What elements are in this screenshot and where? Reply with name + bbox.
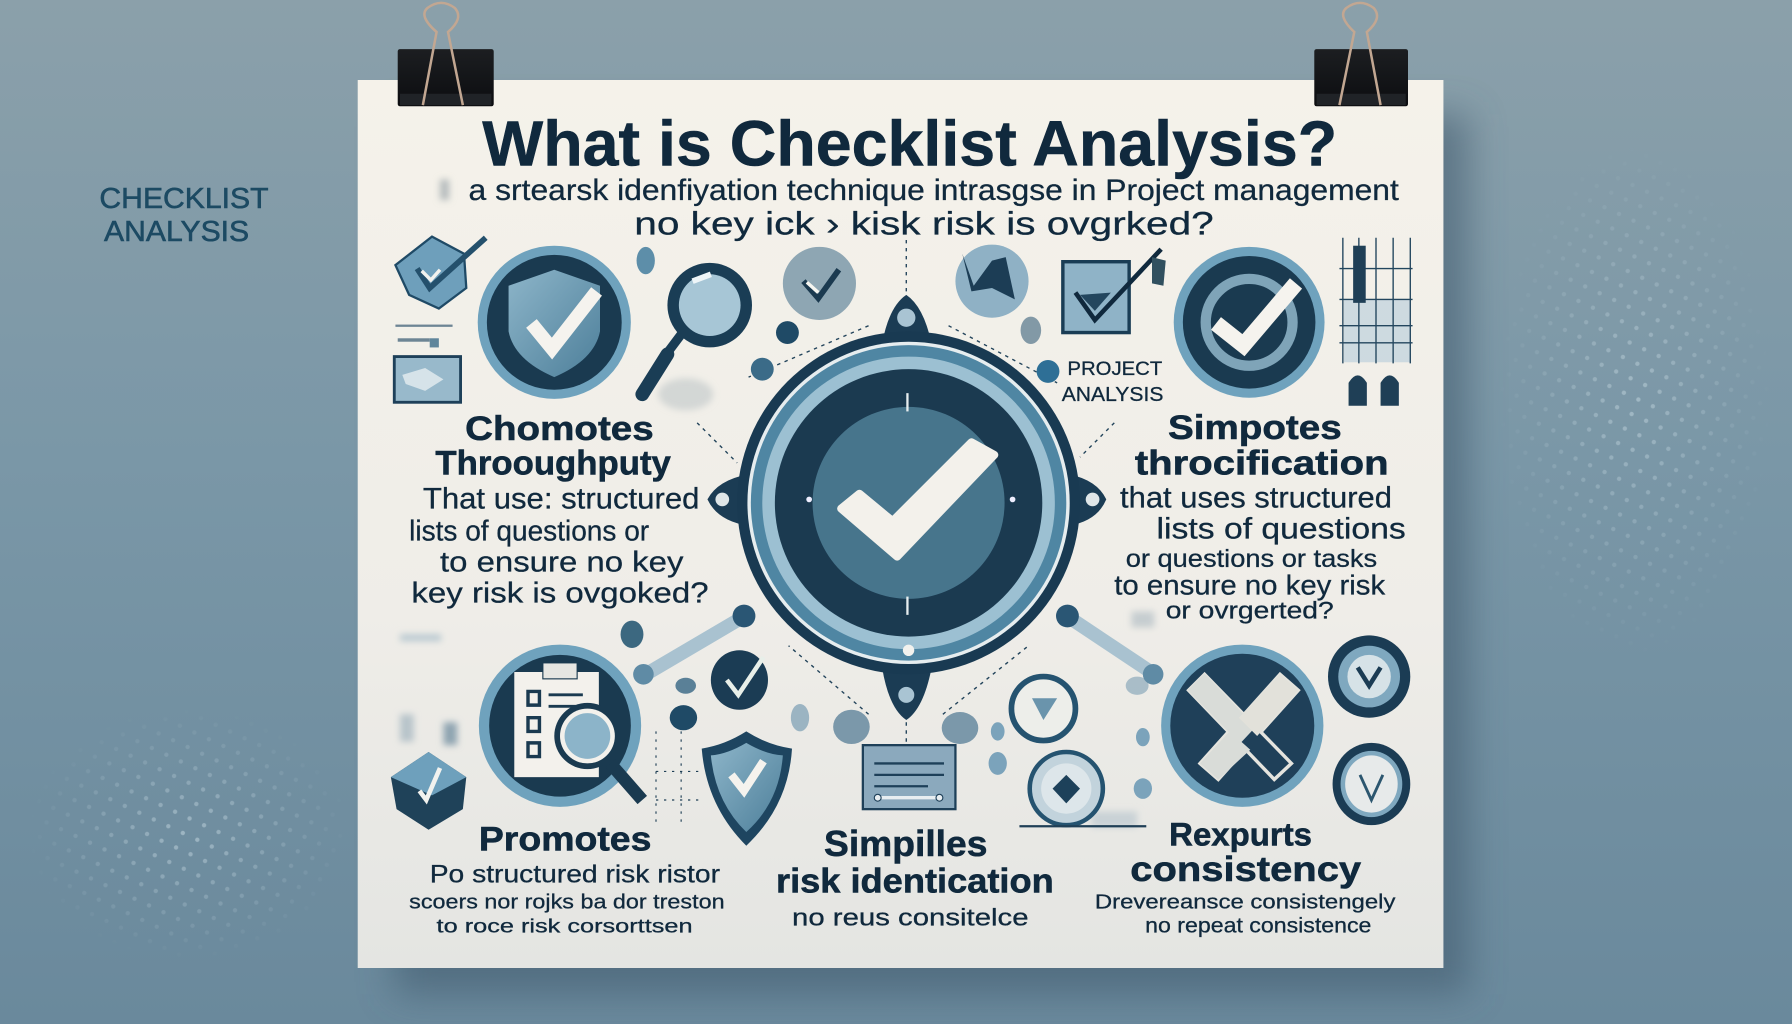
text block: left benefit: to ensure no key	[440, 546, 684, 578]
label: project analysis: ANALYSIS	[1062, 383, 1163, 406]
text block: right benefit: Simpotes	[1168, 409, 1342, 447]
icon: dark check circle	[711, 650, 768, 710]
icon: small framed window	[394, 357, 461, 402]
text block: bottom left: to roce risk corsorttsen	[437, 916, 693, 938]
icon: checkbox with pen	[1063, 249, 1166, 333]
text block: left benefit: That use: structured	[423, 483, 699, 516]
title: What is Checklist Analysis?	[482, 108, 1337, 180]
text block: left benefit	[409, 410, 709, 609]
text block: right benefit: or ovrgerted?	[1166, 597, 1334, 624]
dashed connectors	[697, 240, 1114, 743]
text block: bottom right	[1095, 817, 1396, 938]
icon: large check mark	[841, 442, 994, 557]
icon: shield with check	[702, 731, 792, 846]
icon: magnifying glass	[642, 263, 752, 394]
side label: checklist analysis: ANALYSIS	[104, 216, 249, 248]
side label: checklist analysis	[99, 183, 269, 248]
dotted grid	[656, 731, 699, 823]
label: project analysis: PROJECT	[1067, 358, 1162, 380]
text block: right benefit	[1114, 409, 1406, 624]
blurred smudges	[400, 179, 1154, 827]
scattered dots	[621, 247, 1152, 799]
binder clip left	[398, 3, 494, 106]
icon: ring with chevron	[1333, 743, 1410, 825]
connector band lower right	[1056, 605, 1163, 685]
icon: cross circle	[1161, 645, 1323, 807]
text block: bottom right: no repeat consistence	[1145, 913, 1371, 938]
icon: gem with check	[391, 752, 466, 830]
text block: bottom right: Drevereansce consistengely	[1095, 891, 1396, 914]
text block: bottom centre: risk identication	[776, 863, 1054, 901]
icon: target ring with chevron	[1328, 635, 1410, 718]
small text smudge block	[395, 325, 453, 347]
poster shadow	[394, 114, 1469, 994]
text block: right benefit: lists of questions	[1157, 512, 1406, 545]
text block: bottom centre: Simpilles	[824, 823, 987, 864]
icon: check circle right	[1174, 247, 1325, 398]
text block: bottom right: Rexpurts	[1169, 817, 1312, 853]
text block: bottom left: Po structured risk ristor	[430, 860, 720, 888]
poster paper	[358, 80, 1443, 968]
icon: top badge blob	[955, 245, 1029, 318]
central check badge	[707, 295, 1106, 720]
label: project analysis	[1062, 358, 1163, 406]
text block: bottom centre	[776, 823, 1054, 932]
side label: checklist analysis: CHECKLIST	[99, 183, 269, 215]
subtitle: a srtearsk idenfiyation technique intrasgse in Project management	[469, 174, 1400, 207]
text block: right benefit: throcification	[1135, 444, 1389, 482]
icon: clipboard and magnifier circle	[479, 645, 642, 807]
text block: bottom left: scoers nor rojks ba dor treston	[409, 891, 725, 914]
icon: shield check circle	[478, 246, 631, 399]
icon: form panel	[863, 745, 955, 809]
binder clip right	[1314, 3, 1408, 106]
icon: ring with triangle	[1011, 677, 1075, 741]
subtitle: no key ick › kisk risk is ovgrked?	[634, 205, 1214, 241]
text block: left benefit: lists of questions or	[409, 516, 650, 548]
icon: small grid chart	[1339, 238, 1413, 406]
text block: left benefit: Chomotes	[465, 410, 654, 448]
subtitle	[469, 174, 1400, 241]
icon: grey check circle	[783, 247, 856, 320]
badge lugs	[707, 295, 1106, 720]
text block: bottom centre: no reus consitelce	[792, 905, 1029, 932]
connector band lower left	[633, 605, 755, 685]
text block: right benefit: to ensure no key risk	[1114, 569, 1385, 600]
icon: top-left check badge	[395, 237, 486, 309]
text block: bottom right: consistency	[1130, 849, 1361, 889]
text block: left benefit: key risk is ovgoked?	[411, 577, 709, 609]
icon: ring with diamond	[1019, 752, 1146, 826]
text block: right benefit: that uses structured	[1120, 481, 1392, 514]
text block: bottom left: Promotes	[479, 820, 651, 858]
text block: left benefit: Throoughputy	[435, 444, 671, 482]
text block: bottom left	[409, 820, 725, 938]
text block: right benefit: or questions or tasks	[1126, 545, 1377, 573]
